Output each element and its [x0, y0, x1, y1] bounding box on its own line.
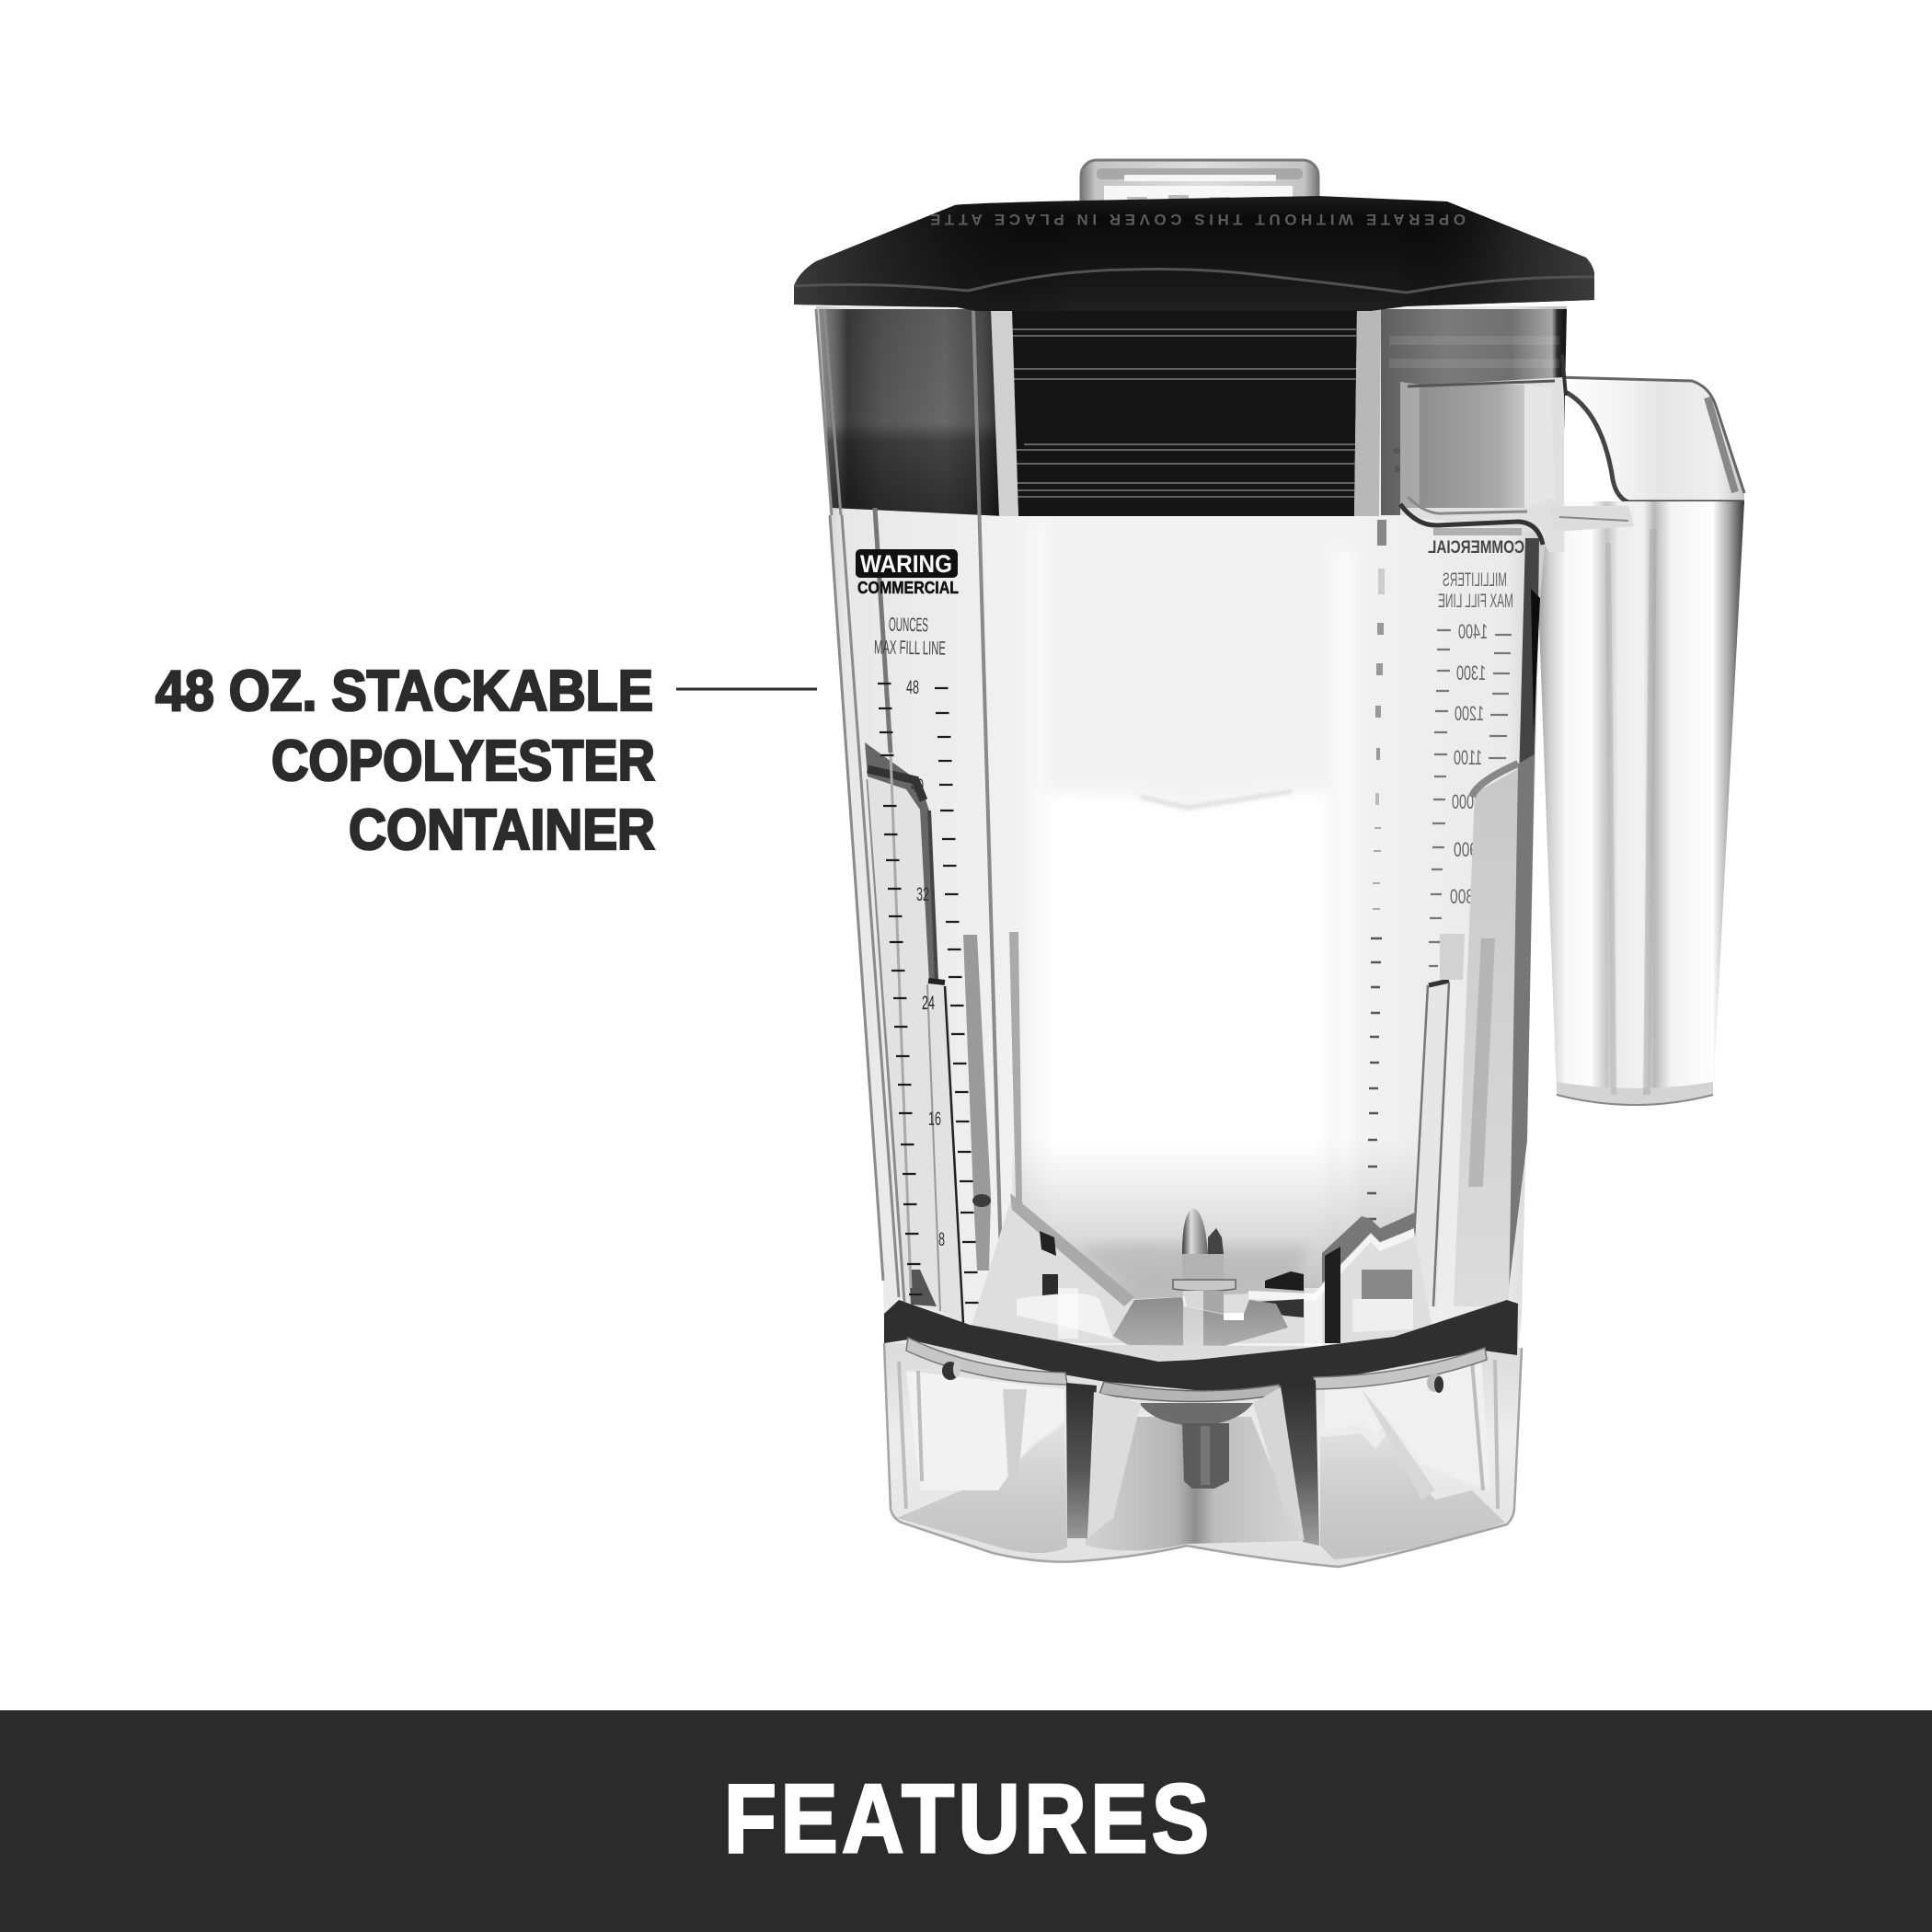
logo: Waring Commercial: WARING	[860, 550, 952, 578]
logo: Waring Commercial: COMMERCIAL	[857, 579, 959, 597]
ounces scale: 8	[938, 1229, 945, 1250]
lower sleeve	[1183, 1291, 1224, 1314]
cone	[1113, 1297, 1288, 1359]
milliliters scale, mirrored through the jar: 1100	[1454, 746, 1482, 769]
black lid: OPERATE WITHOUT THIS COVER IN PLACE ATTE	[930, 211, 1466, 228]
ounces scale: 24	[922, 993, 935, 1014]
jar body	[816, 306, 1567, 1357]
logo: Waring Commercial	[856, 549, 959, 597]
callout label: CONTAINER	[349, 798, 655, 862]
handle upper grip	[1553, 377, 1744, 504]
dark triangle	[1265, 1271, 1304, 1291]
soft interior window	[1012, 524, 1417, 1306]
milliliters scale, mirrored through the jar: MILLILITERS	[1443, 569, 1507, 591]
dark shard	[1325, 1247, 1340, 1343]
jar right edge highlights	[1503, 538, 1540, 1288]
drive shaft	[1182, 1423, 1229, 1489]
milliliters scale, mirrored through the jar: 800	[1450, 885, 1474, 908]
left bowl edge	[1010, 1193, 1134, 1306]
ounces scale: 16	[928, 1109, 941, 1130]
right lower reflection	[1352, 1299, 1413, 1332]
left rail	[906, 1338, 1067, 1385]
ounces scale: 48	[906, 677, 919, 698]
bowl bottom and blade assembly	[966, 1193, 1435, 1362]
base details	[884, 1300, 1522, 1567]
ounces scale: MAX FILL LINE	[874, 637, 946, 660]
base body	[884, 1343, 1522, 1567]
left panel window	[906, 1371, 1064, 1490]
leg left inner	[1087, 1392, 1141, 1538]
shaft highlight	[1201, 1426, 1210, 1485]
fin left	[1003, 1389, 1027, 1495]
ounces scale: 32	[916, 884, 929, 905]
leg right	[1281, 1380, 1319, 1546]
left edge lines	[816, 309, 904, 1302]
centre rail	[1099, 1382, 1283, 1402]
leg left	[1066, 1383, 1097, 1538]
bullet blade	[1182, 1208, 1208, 1254]
footer band	[0, 1710, 1932, 1932]
screw right	[1427, 1374, 1443, 1393]
ounces scale: OUNCES	[889, 615, 928, 636]
heading: features: FEATURES	[724, 1765, 1209, 1873]
secondary blade	[1208, 1228, 1224, 1254]
milliliters scale, mirrored through the jar: 1400	[1458, 620, 1488, 643]
milliliters scale, mirrored through the jar: 1200	[1455, 702, 1484, 725]
callout label: COPOLYESTER	[271, 729, 655, 793]
dark top band of jar	[819, 309, 1567, 1323]
base outline	[884, 1343, 1522, 1567]
leg right inner	[1253, 1387, 1305, 1542]
blender container product image	[794, 160, 1744, 1567]
drive disc	[1139, 1403, 1253, 1426]
glint	[1224, 1313, 1244, 1320]
lower left reflection	[1017, 1294, 1113, 1339]
fin right	[1362, 1389, 1435, 1500]
ounces scale: 40	[911, 776, 924, 797]
black lid	[794, 196, 1594, 311]
sleeve	[1182, 1254, 1224, 1282]
wall lines	[899, 1360, 1498, 1509]
handle socket	[1400, 354, 1634, 552]
ounces scale	[874, 615, 979, 1303]
lower bowl shadow block	[1042, 1274, 1058, 1296]
band	[884, 1300, 1518, 1391]
left recess	[865, 742, 1023, 1323]
bowl lower tint	[966, 1196, 1435, 1343]
right panel window	[1325, 1357, 1490, 1490]
nut disc	[1173, 1280, 1236, 1292]
callout label: 48 OZ. STACKABLE	[155, 659, 653, 723]
base floor centre	[1086, 1417, 1302, 1551]
callout leader line	[676, 688, 817, 690]
base floor right	[1320, 1431, 1505, 1559]
right rail	[1314, 1348, 1487, 1389]
handle lower body	[1535, 501, 1744, 1105]
milliliters scale, mirrored through the jar: 1300	[1456, 661, 1486, 684]
milliliters scale, mirrored through the jar	[1428, 528, 1524, 966]
screw left	[942, 1361, 960, 1380]
white stripes	[1058, 1288, 1322, 1362]
right bowl edge	[1248, 1228, 1414, 1301]
right bowl gray	[1322, 1213, 1415, 1283]
right recess panel	[1410, 764, 1518, 1306]
milliliters scale, mirrored through the jar: 1000	[1452, 790, 1481, 813]
soft shadow above bowl	[1076, 1243, 1306, 1293]
milliliters scale, mirrored through the jar: 900	[1454, 838, 1478, 861]
milliliters scale, mirrored through the jar: COMMERCIAL	[1428, 538, 1524, 558]
milliliters scale, mirrored through the jar: MAX FILL LINE	[1438, 591, 1513, 612]
callout label	[155, 659, 655, 862]
mirrored rear gauge column	[1367, 520, 1386, 1219]
left dark chunk	[1040, 1231, 1056, 1256]
right chamber	[1362, 1270, 1412, 1299]
lid knob	[1081, 160, 1318, 224]
base floor left	[897, 1424, 1067, 1553]
lower dark streak	[1256, 1299, 1304, 1317]
